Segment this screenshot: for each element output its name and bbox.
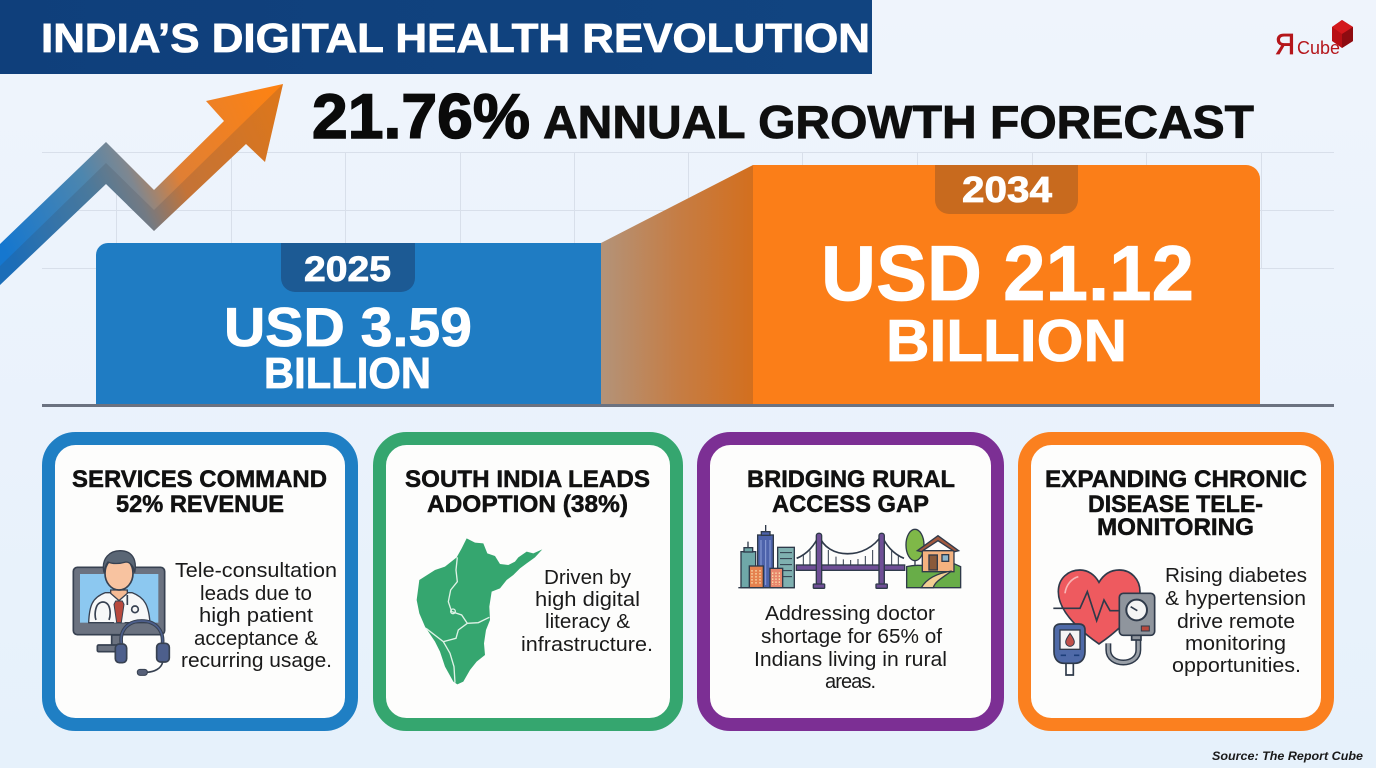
text: doctor shortage: shortage for 65% of	[761, 626, 942, 648]
growth arrow	[0, 84, 283, 285]
icon: map of south india	[417, 538, 542, 684]
icon: tele-doctor on monitor with headset	[73, 551, 169, 675]
heading: rural access: BRIDGING RURAL	[747, 466, 955, 493]
text: digital literacy	[521, 567, 653, 656]
text: remote monitoring	[1165, 565, 1307, 677]
text: remote monitoring: drive remote	[1177, 611, 1295, 633]
icon: heart, glucometer and blood pressure monitor	[1053, 570, 1155, 675]
title banner: INDIA’S DIGITAL HEALTH REVOLUTION	[41, 15, 870, 61]
text: digital literacy: high digital	[535, 589, 640, 611]
text: doctor shortage: areas.	[825, 671, 876, 693]
text: tele-consultation	[175, 560, 337, 672]
bar: 2025 value	[96, 243, 601, 404]
panel: services revenue	[48, 438, 352, 724]
heading: services: 52% REVENUE	[116, 491, 284, 518]
text: tele-consultation: acceptance &	[194, 628, 319, 650]
heading: services: SERVICES COMMAND	[72, 466, 327, 493]
logo: RCube: Я	[1275, 29, 1295, 61]
bar: 2025 value: USD 3.59	[224, 296, 472, 358]
logo: RCube: Cube	[1297, 38, 1340, 58]
year badge 2034	[935, 165, 1078, 214]
text: tele-consultation: leads due to	[200, 583, 312, 605]
heading: rural access	[747, 466, 955, 518]
heading: chronic disease	[1045, 466, 1307, 541]
text: remote monitoring: Rising diabetes	[1165, 565, 1307, 587]
heading: chronic disease: MONITORING	[1097, 514, 1254, 541]
text: digital literacy: infrastructure.	[521, 634, 653, 656]
heading: south india: SOUTH INDIA LEADS	[405, 466, 650, 493]
title banner	[0, 0, 872, 74]
bar: 2025 value: BILLION	[264, 349, 431, 398]
text: tele-consultation: Tele-consultation	[175, 560, 337, 582]
text: digital literacy: Driven by	[544, 567, 631, 589]
text: remote monitoring: & hypertension	[1165, 588, 1306, 610]
text: doctor shortage	[754, 603, 947, 693]
text: tele-consultation: recurring usage.	[181, 650, 332, 672]
heading: rural access: ACCESS GAP	[772, 491, 929, 518]
heading: chronic disease: DISEASE TELE-	[1088, 491, 1263, 518]
connector between bars	[601, 165, 753, 404]
growth forecast headline: ANNUAL GROWTH FORECAST	[543, 96, 1254, 148]
year badge 2025: 2025	[304, 250, 391, 289]
heading: south india	[405, 466, 650, 518]
panel: rural access	[704, 438, 998, 724]
growth forecast headline: 21.76%	[312, 82, 530, 152]
bar: 2034 value	[753, 165, 1260, 404]
year badge 2034: 2034	[962, 169, 1052, 210]
growth forecast headline	[312, 82, 1254, 152]
text: doctor shortage: Addressing doctor	[765, 603, 935, 625]
text: tele-consultation: high patient	[199, 605, 313, 627]
panel: south india	[380, 438, 676, 724]
bar: 2034 value: BILLION	[886, 308, 1127, 374]
source note: Source: The Report Cube	[1212, 749, 1363, 763]
heading: south india: ADOPTION (38%)	[427, 491, 628, 518]
heading: services	[72, 466, 327, 518]
text: doctor shortage: Indians living in rural	[754, 649, 947, 671]
year badge 2025	[281, 243, 415, 292]
text: remote monitoring: monitoring	[1185, 633, 1286, 655]
logo: RCube	[1275, 20, 1353, 61]
bar: 2034 value: USD 21.12	[821, 229, 1194, 317]
panel: chronic disease	[1024, 438, 1328, 724]
icon: city, bridge and village	[738, 525, 961, 588]
text: remote monitoring: opportunities.	[1172, 655, 1301, 677]
text: digital literacy: literacy &	[545, 611, 631, 633]
heading: chronic disease: EXPANDING CHRONIC	[1045, 466, 1307, 493]
